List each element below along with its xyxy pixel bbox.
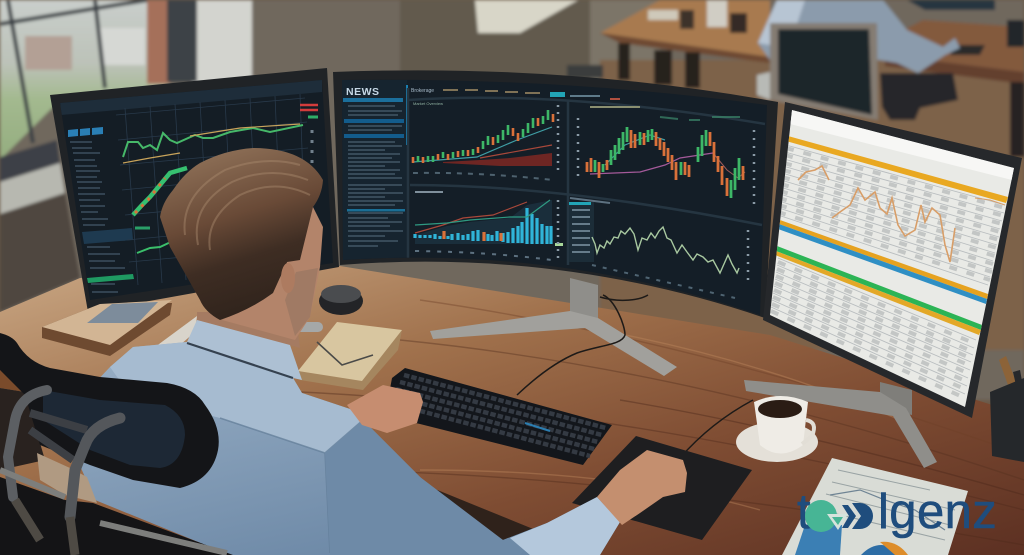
right monitor stand bbox=[744, 380, 937, 468]
desk bbox=[0, 266, 1024, 555]
chair tan floor gap bbox=[37, 453, 97, 503]
rear colleague bbox=[757, 0, 960, 120]
far hand bbox=[347, 385, 423, 433]
spreadsheet bbox=[771, 110, 1014, 398]
pen holder bbox=[990, 356, 1024, 462]
center monitor bbox=[333, 70, 778, 318]
center monitor dashboard bbox=[342, 80, 765, 298]
center monitor stand bbox=[430, 278, 677, 376]
top toolbar bbox=[411, 88, 620, 99]
beard shadow bbox=[285, 268, 318, 336]
chart: top left candlesticks bbox=[413, 101, 558, 180]
face bbox=[222, 200, 323, 340]
neck bbox=[197, 312, 300, 348]
chair bars bbox=[30, 413, 87, 460]
phone bbox=[293, 322, 323, 332]
collar bbox=[187, 320, 302, 380]
shoulder seam bbox=[220, 418, 363, 553]
coffee cup bbox=[736, 396, 818, 462]
person bbox=[60, 148, 687, 555]
left window bbox=[0, 0, 197, 312]
notebook bbox=[298, 322, 402, 390]
news sidebar bbox=[343, 85, 408, 246]
chart: top right candlesticks bbox=[578, 107, 754, 205]
right monitor bbox=[763, 102, 1022, 418]
monitor foot bbox=[87, 302, 158, 323]
left monitor bbox=[50, 68, 339, 312]
rear floor bbox=[600, 60, 1024, 350]
mouse pad bbox=[572, 436, 752, 540]
hair bbox=[160, 148, 323, 320]
desk front edge left bbox=[0, 370, 25, 392]
chair strut bbox=[15, 500, 75, 555]
chair arm right bbox=[70, 418, 120, 517]
background room bbox=[0, 0, 1024, 400]
ear bbox=[281, 263, 295, 293]
chart: bottom right line bbox=[569, 198, 748, 298]
logo: toolgenz bbox=[797, 485, 997, 539]
shirt back bbox=[60, 342, 620, 555]
keyboard bbox=[385, 368, 612, 465]
logo wordmark: lgenz bbox=[878, 485, 997, 539]
logo teal circle bbox=[805, 500, 848, 532]
left monitor charts bbox=[60, 78, 322, 292]
collar shadow line bbox=[187, 343, 293, 378]
chair back outer bbox=[0, 333, 219, 488]
cables bbox=[517, 295, 753, 458]
news heading: NEWS bbox=[346, 86, 380, 98]
logo wordmark: t bbox=[797, 485, 811, 539]
under desk area bbox=[0, 388, 45, 470]
logo navy arrows and circle bbox=[842, 503, 873, 529]
chair lower frame bbox=[0, 477, 233, 555]
chart: bottom left bars bbox=[415, 192, 563, 262]
under desk near arm bbox=[430, 487, 597, 555]
shirt cuff bbox=[510, 497, 620, 555]
chart: top left candlesticks: Market Overview bbox=[413, 101, 443, 106]
top toolbar: Brokerage bbox=[411, 88, 434, 94]
papers bbox=[782, 458, 968, 555]
chair bbox=[0, 333, 233, 555]
chair mesh bbox=[43, 390, 185, 468]
white paper behind collar bbox=[155, 316, 197, 347]
near hand bbox=[597, 450, 687, 525]
monitor mount knob bbox=[567, 65, 603, 78]
shirt yoke bbox=[110, 342, 363, 453]
chair silver rail bbox=[0, 470, 227, 553]
rear desk left bbox=[600, 0, 770, 88]
hair swirl strokes bbox=[184, 161, 310, 250]
books bbox=[42, 300, 172, 356]
rear desk right bbox=[885, 0, 1024, 157]
panel dividers bbox=[408, 88, 765, 265]
smart speaker bbox=[319, 285, 363, 315]
sleeve shade bbox=[325, 420, 547, 555]
chair arm left bbox=[8, 390, 47, 497]
